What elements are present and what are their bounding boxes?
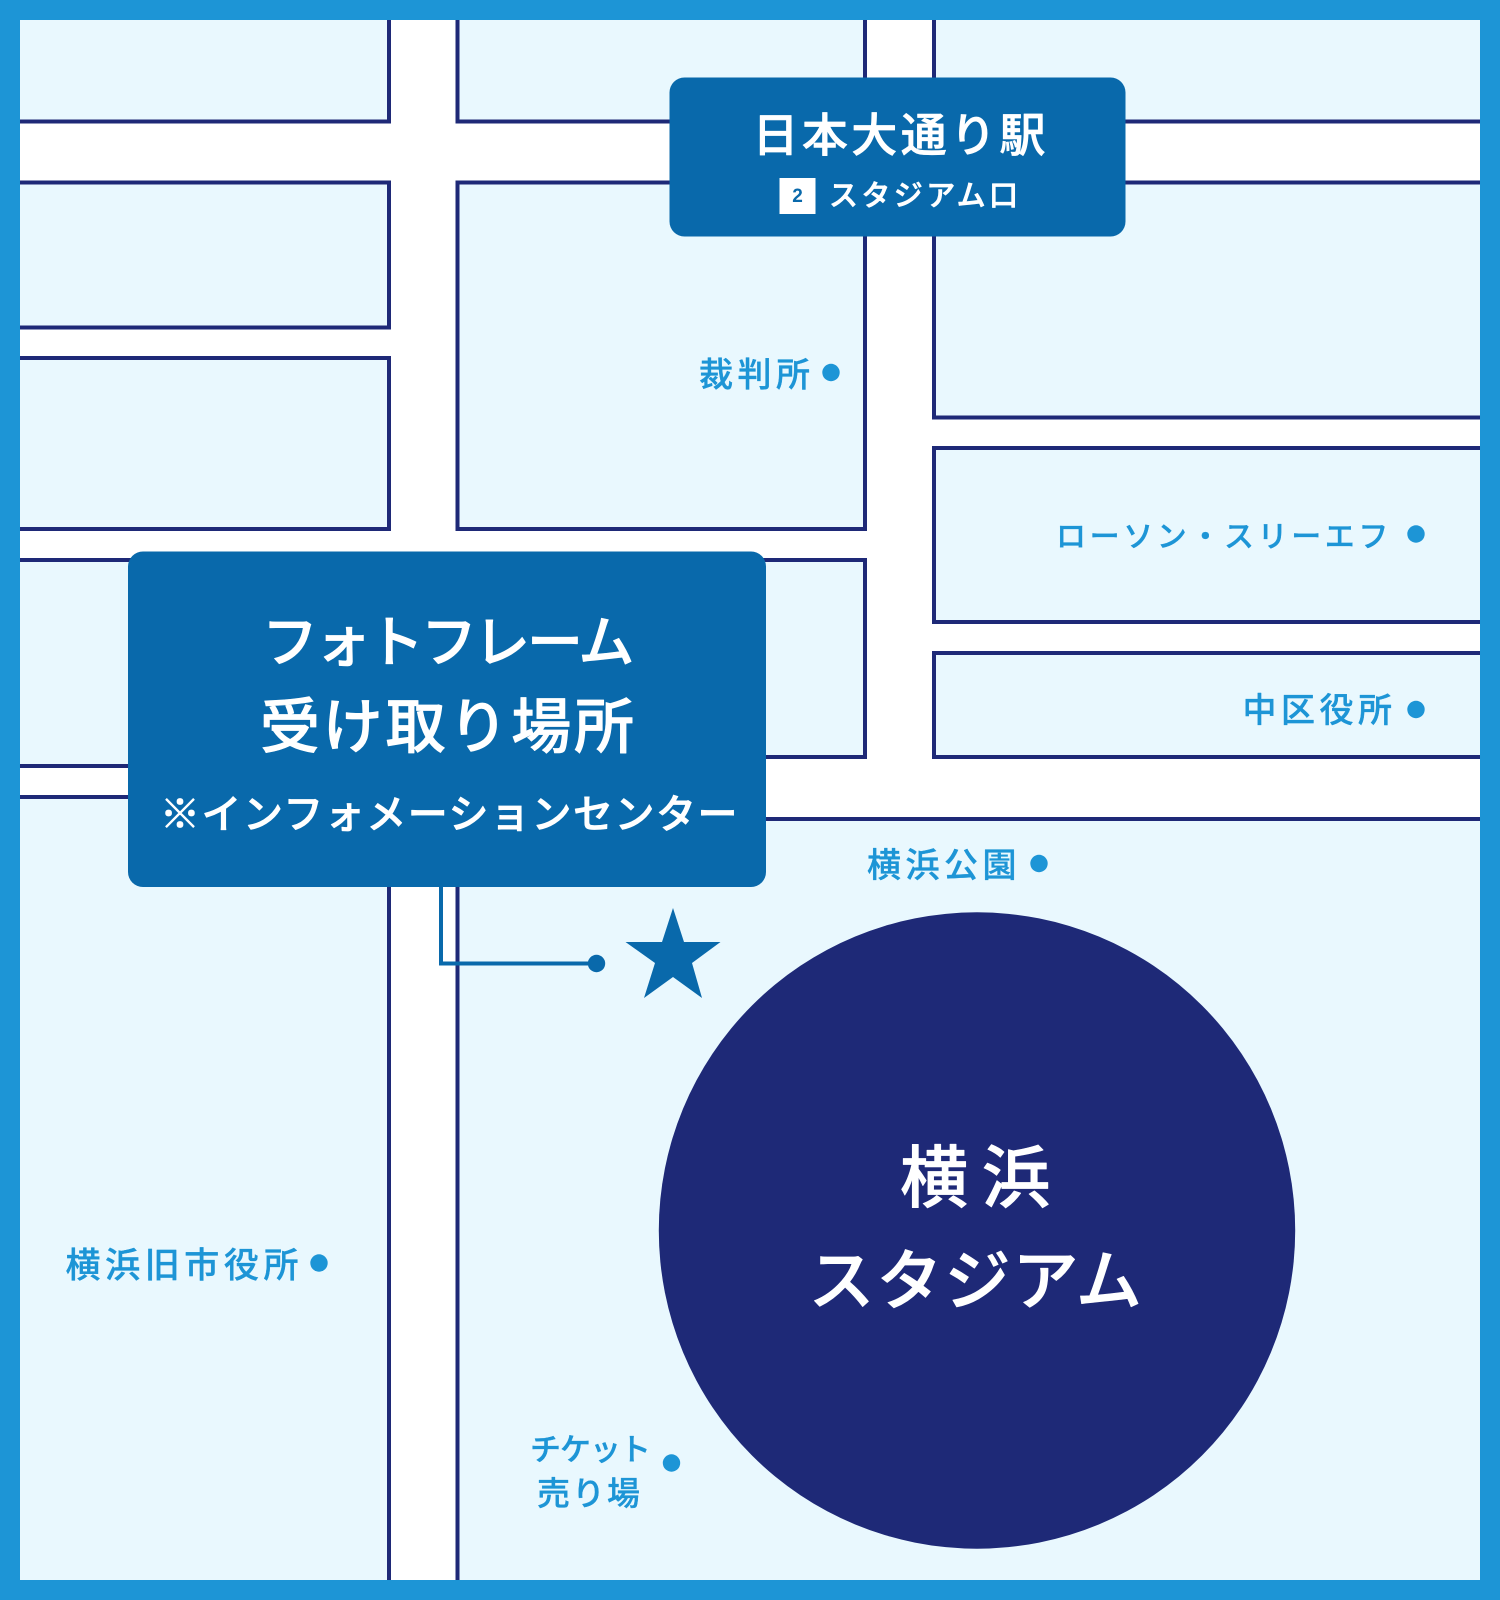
label: Lawson 3F: ローソン・スリーエフ [1056, 521, 1392, 554]
panel note: ※インフォメーションセンター [160, 793, 739, 837]
stadium circle: スタジアム [808, 1244, 1144, 1318]
pickup location panel [128, 552, 766, 887]
label: ticket office [530, 1432, 680, 1512]
stadium name: 横浜 [900, 1141, 1064, 1217]
exit name: スタジアム口 [829, 180, 1021, 212]
label: ward office: 中区役所 [1242, 692, 1396, 730]
label: old city hall: 横浜旧市役所 [66, 1246, 303, 1286]
label: courthouse: 裁判所 [699, 356, 814, 394]
exit number badge: 2 [792, 186, 803, 207]
label: ticket office: チケット [530, 1432, 650, 1468]
exit number badge [780, 178, 816, 214]
label: Yokohama park: 横浜公園 [867, 847, 1021, 885]
pickup location panel: 受け取り場所 [260, 694, 637, 761]
label: ticket office: 売り場 [537, 1475, 642, 1512]
star marker [626, 908, 720, 998]
panel heading: フォトフレーム [262, 611, 631, 674]
connector line [441, 887, 605, 972]
stadium circle [659, 912, 1295, 1549]
station name: 日本大通り駅 [752, 110, 1049, 162]
station panel [670, 78, 1126, 236]
